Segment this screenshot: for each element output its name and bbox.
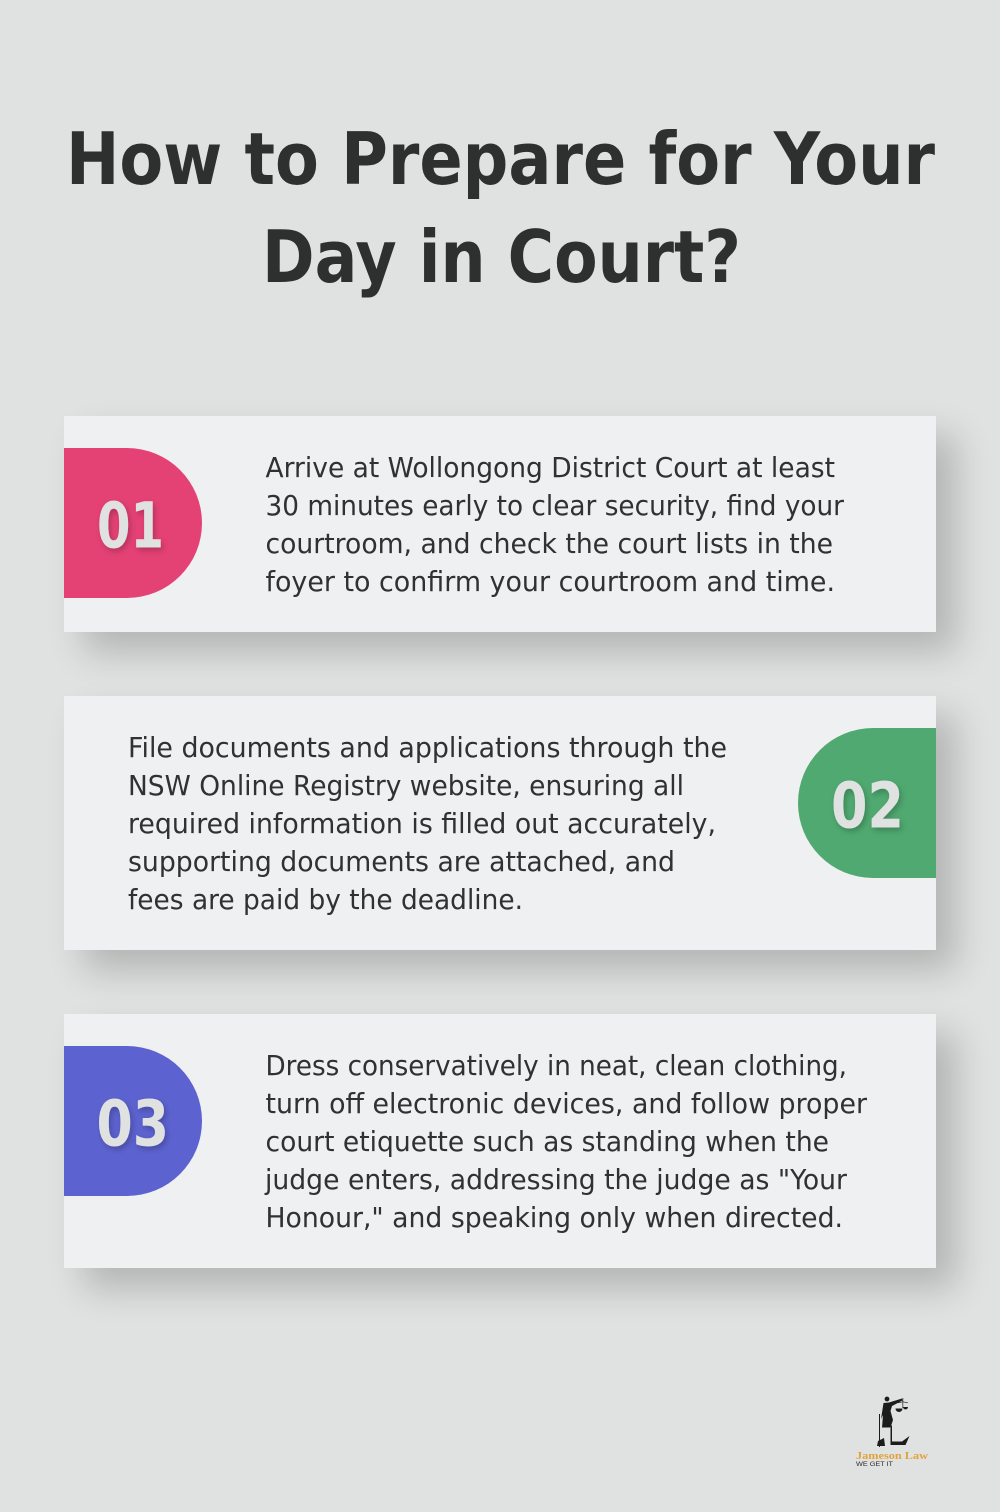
step 3 text: turn off electronic devices, and follow proper	[266, 1087, 867, 1120]
step 1 text	[266, 451, 844, 598]
panel: card 1 background	[64, 416, 936, 632]
logo tagline: WE GET IT	[856, 1462, 893, 1468]
step 2 badge	[798, 728, 936, 878]
step 2 text: supporting documents are attached, and	[128, 845, 675, 878]
step 3 badge	[64, 1046, 202, 1196]
step 3 text: Honour," and speaking only when directed.	[266, 1201, 843, 1234]
step 1 text: foyer to confirm your courtroom and time.	[266, 565, 835, 598]
step 3 text: Dress conservatively in neat, clean clothing,	[266, 1049, 847, 1082]
step 1 number: 01	[97, 490, 164, 562]
step 2 text: required information is filled out accurately,	[128, 807, 716, 840]
step 1 text: Arrive at Wollongong District Court at least	[266, 451, 835, 484]
icon: lady justice	[877, 1397, 910, 1447]
step 1 text: courtroom, and check the court lists in the	[266, 527, 833, 560]
logo name: Jameson Law	[856, 1451, 928, 1462]
logo: Jameson Law	[856, 1397, 928, 1468]
step 3 text	[264, 1049, 867, 1234]
step 2 text: fees are paid by the deadline.	[128, 883, 523, 916]
step 2 text: NSW Online Registry website, ensuring all	[128, 769, 684, 802]
step 1 badge	[64, 448, 202, 598]
step 3 text: judge enters, addressing the judge as "Your	[264, 1163, 847, 1196]
title	[66, 117, 935, 299]
step 2 number: 02	[831, 770, 904, 842]
step 2 text: File documents and applications through the	[128, 731, 727, 764]
step 3 text: court etiquette such as standing when the	[266, 1125, 829, 1158]
title: Day in Court?	[262, 215, 741, 299]
step 2 text	[128, 731, 727, 916]
panel: card 2 background	[64, 696, 936, 950]
step 3 number: 03	[96, 1088, 169, 1160]
panel: card 3 background	[64, 1014, 936, 1268]
step 1 text: 30 minutes early to clear security, find your	[266, 489, 844, 522]
